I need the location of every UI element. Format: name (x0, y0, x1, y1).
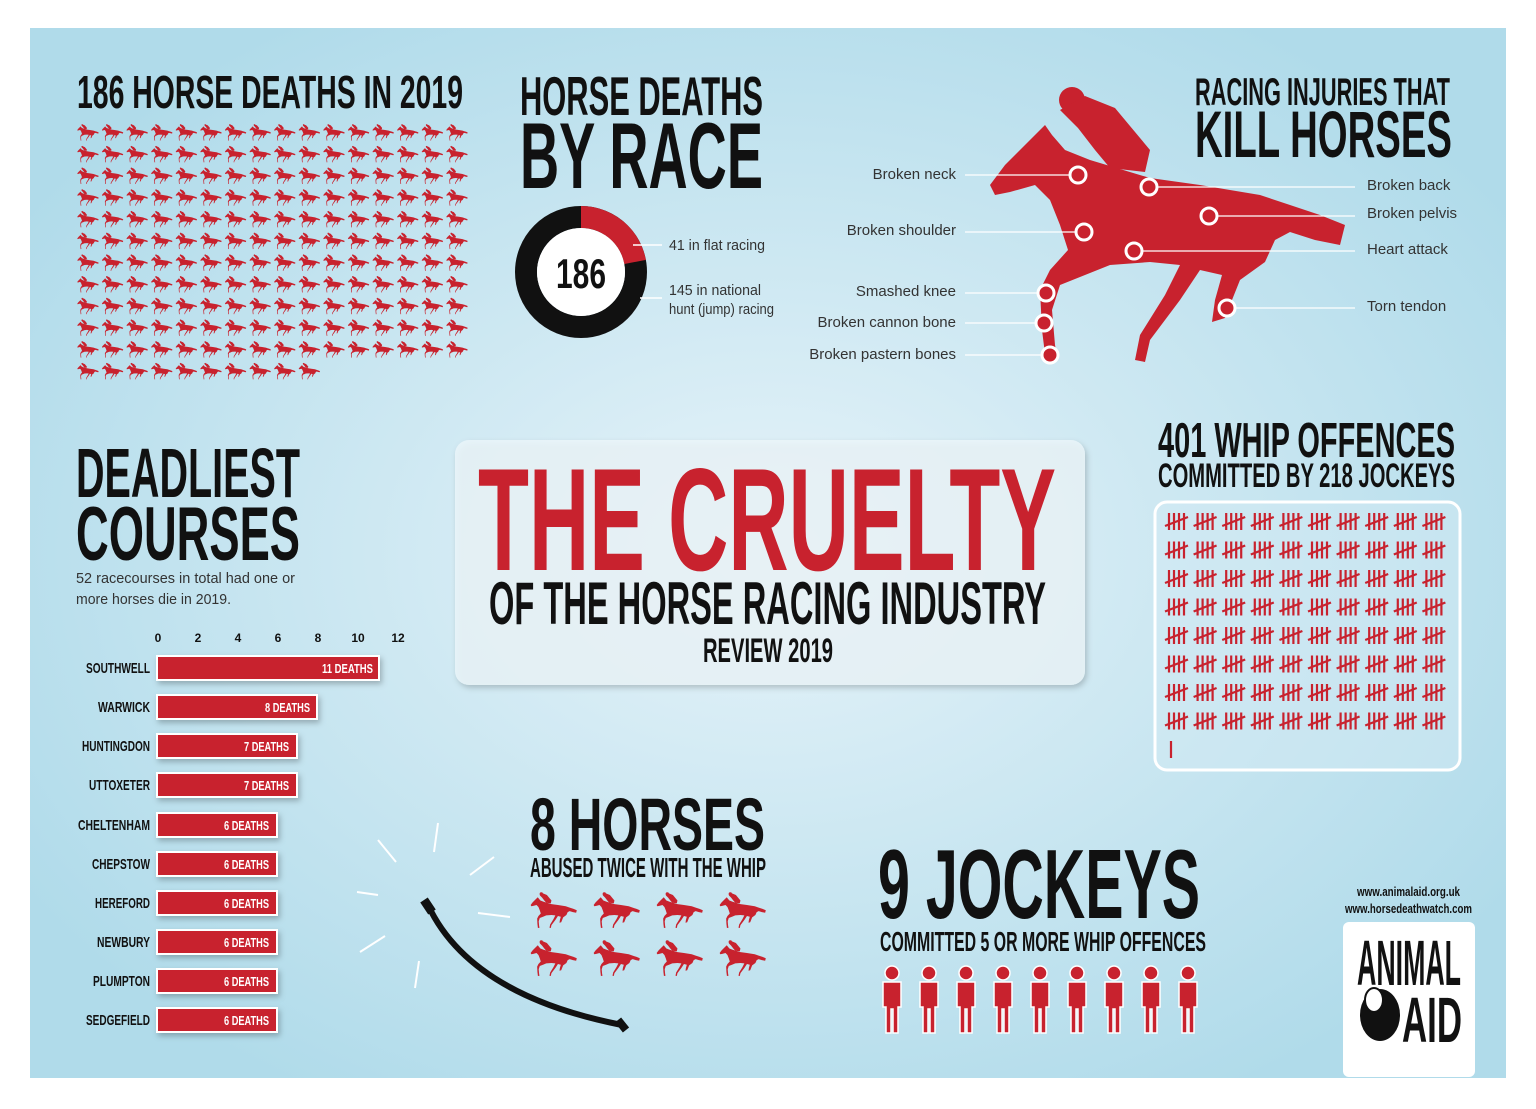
bar chart: deaths by course: SEDGEFIELD (86, 1012, 150, 1029)
websites (1344, 884, 1472, 916)
large horse with injury points: Broken back (1367, 177, 1451, 194)
bar chart: deaths by course: 7 DEATHS (244, 739, 289, 754)
bar chart: deaths by course: 11 DEATHS (322, 661, 373, 676)
heading: horse deaths by race: HORSE DEATHS (520, 65, 763, 127)
icon: whip with motion lines (357, 823, 626, 1030)
bar chart: deaths by course: CHELTENHAM (78, 817, 150, 834)
bar chart: deaths by course: SOUTHWELL (86, 660, 150, 677)
title panel: OF THE HORSE RACING INDUSTRY (489, 570, 1046, 637)
heading: deadliest courses: COURSES (76, 492, 300, 577)
icons: 9 jockeys (883, 966, 1197, 1033)
heading: 8 horses abused twice: ABUSED TWICE WITH THE WHIP (530, 852, 766, 883)
logo: animal aid (1343, 922, 1475, 1077)
bar chart: deaths by course: 6 DEATHS (224, 896, 269, 911)
bar chart: deaths by course: HEREFORD (95, 895, 150, 912)
heading: racing injuries that kill horses (1195, 71, 1452, 171)
bar chart: deaths by course: 8 (315, 631, 322, 645)
bar chart: deaths by course: 6 DEATHS (224, 818, 269, 833)
bar chart: deaths by course: WARWICK (98, 699, 150, 716)
heading: deadliest courses: more horses die in 2019. (76, 591, 231, 608)
heading: 9 jockeys (878, 829, 1206, 957)
bar chart: deaths by course (78, 631, 405, 1032)
bar chart: deaths by course: 6 DEATHS (224, 935, 269, 950)
bar chart: deaths by course: 8 DEATHS (265, 700, 310, 715)
donut chart: 186 (556, 250, 606, 297)
heading: deadliest courses (76, 434, 300, 608)
bar chart: deaths by course: PLUMPTON (93, 973, 150, 990)
large horse with injury points: Broken cannon bone (818, 314, 956, 331)
title panel: THE CRUELTY (478, 438, 1056, 601)
bar chart: deaths by course: 6 DEATHS (224, 857, 269, 872)
bar chart: deaths by course: UTTOXETER (89, 777, 150, 794)
title panel (455, 438, 1085, 685)
large horse with injury points (809, 87, 1457, 363)
bar chart: deaths by course: HUNTINGDON (82, 738, 150, 755)
bar chart: deaths by course: 7 DEATHS (244, 778, 289, 793)
heading: 9 jockeys: COMMITTED 5 OR MORE WHIP OFFENCES (880, 926, 1206, 957)
horse icon grid (186 horses) (77, 124, 468, 379)
large horse with injury points: Broken neck (873, 166, 956, 183)
tally box: 401 offences (1155, 502, 1460, 770)
large horse with injury points: Broken pelvis (1367, 205, 1457, 222)
logo: animal aid: AID (1402, 984, 1462, 1056)
heading: 186 horse deaths in 2019: 186 HORSE DEATHS IN 2019 (77, 66, 463, 118)
title panel: REVIEW 2019 (703, 632, 833, 670)
bar chart: deaths by course: 2 (195, 631, 202, 645)
donut chart: 145 in national (669, 282, 761, 299)
websites: www.horsedeathwatch.com (1344, 901, 1472, 916)
donut chart (526, 217, 774, 327)
bar chart: deaths by course: 12 (391, 631, 405, 645)
bar chart: deaths by course: 6 DEATHS (224, 974, 269, 989)
bar chart: deaths by course: 0 (155, 631, 162, 645)
large horse with injury points: Broken shoulder (847, 222, 956, 239)
websites: www.animalaid.org.uk (1356, 884, 1461, 899)
large horse with injury points: Heart attack (1367, 241, 1448, 258)
heading: deadliest courses: DEADLIEST (76, 434, 300, 512)
heading: deadliest courses: 52 racecourses in total had one or (76, 570, 295, 587)
bar chart: deaths by course: 6 DEATHS (224, 1013, 269, 1028)
bar chart: deaths by course: 10 (351, 631, 365, 645)
donut chart: 41 in flat racing (669, 237, 765, 254)
large horse with injury points: Smashed knee (856, 283, 956, 300)
heading: whip offences (1158, 414, 1455, 495)
heading: 8 horses abused twice (530, 783, 766, 883)
bar chart: deaths by course: CHEPSTOW (92, 856, 151, 873)
heading: horse deaths by race (520, 65, 763, 208)
large horse with injury points: Broken pastern bones (809, 346, 956, 363)
heading: 9 jockeys: 9 JOCKEYS (878, 829, 1200, 939)
donut chart: hunt (jump) racing (669, 301, 774, 318)
heading: horse deaths by race: BY RACE (520, 103, 763, 208)
bar chart: deaths by course: 4 (235, 631, 242, 645)
bar chart: deaths by course: NEWBURY (97, 934, 150, 951)
large horse with injury points: Torn tendon (1367, 298, 1446, 315)
heading: 8 horses abused twice: 8 HORSES (530, 783, 765, 866)
bar chart: deaths by course: 6 (275, 631, 282, 645)
icons: 8 horses (531, 892, 766, 976)
